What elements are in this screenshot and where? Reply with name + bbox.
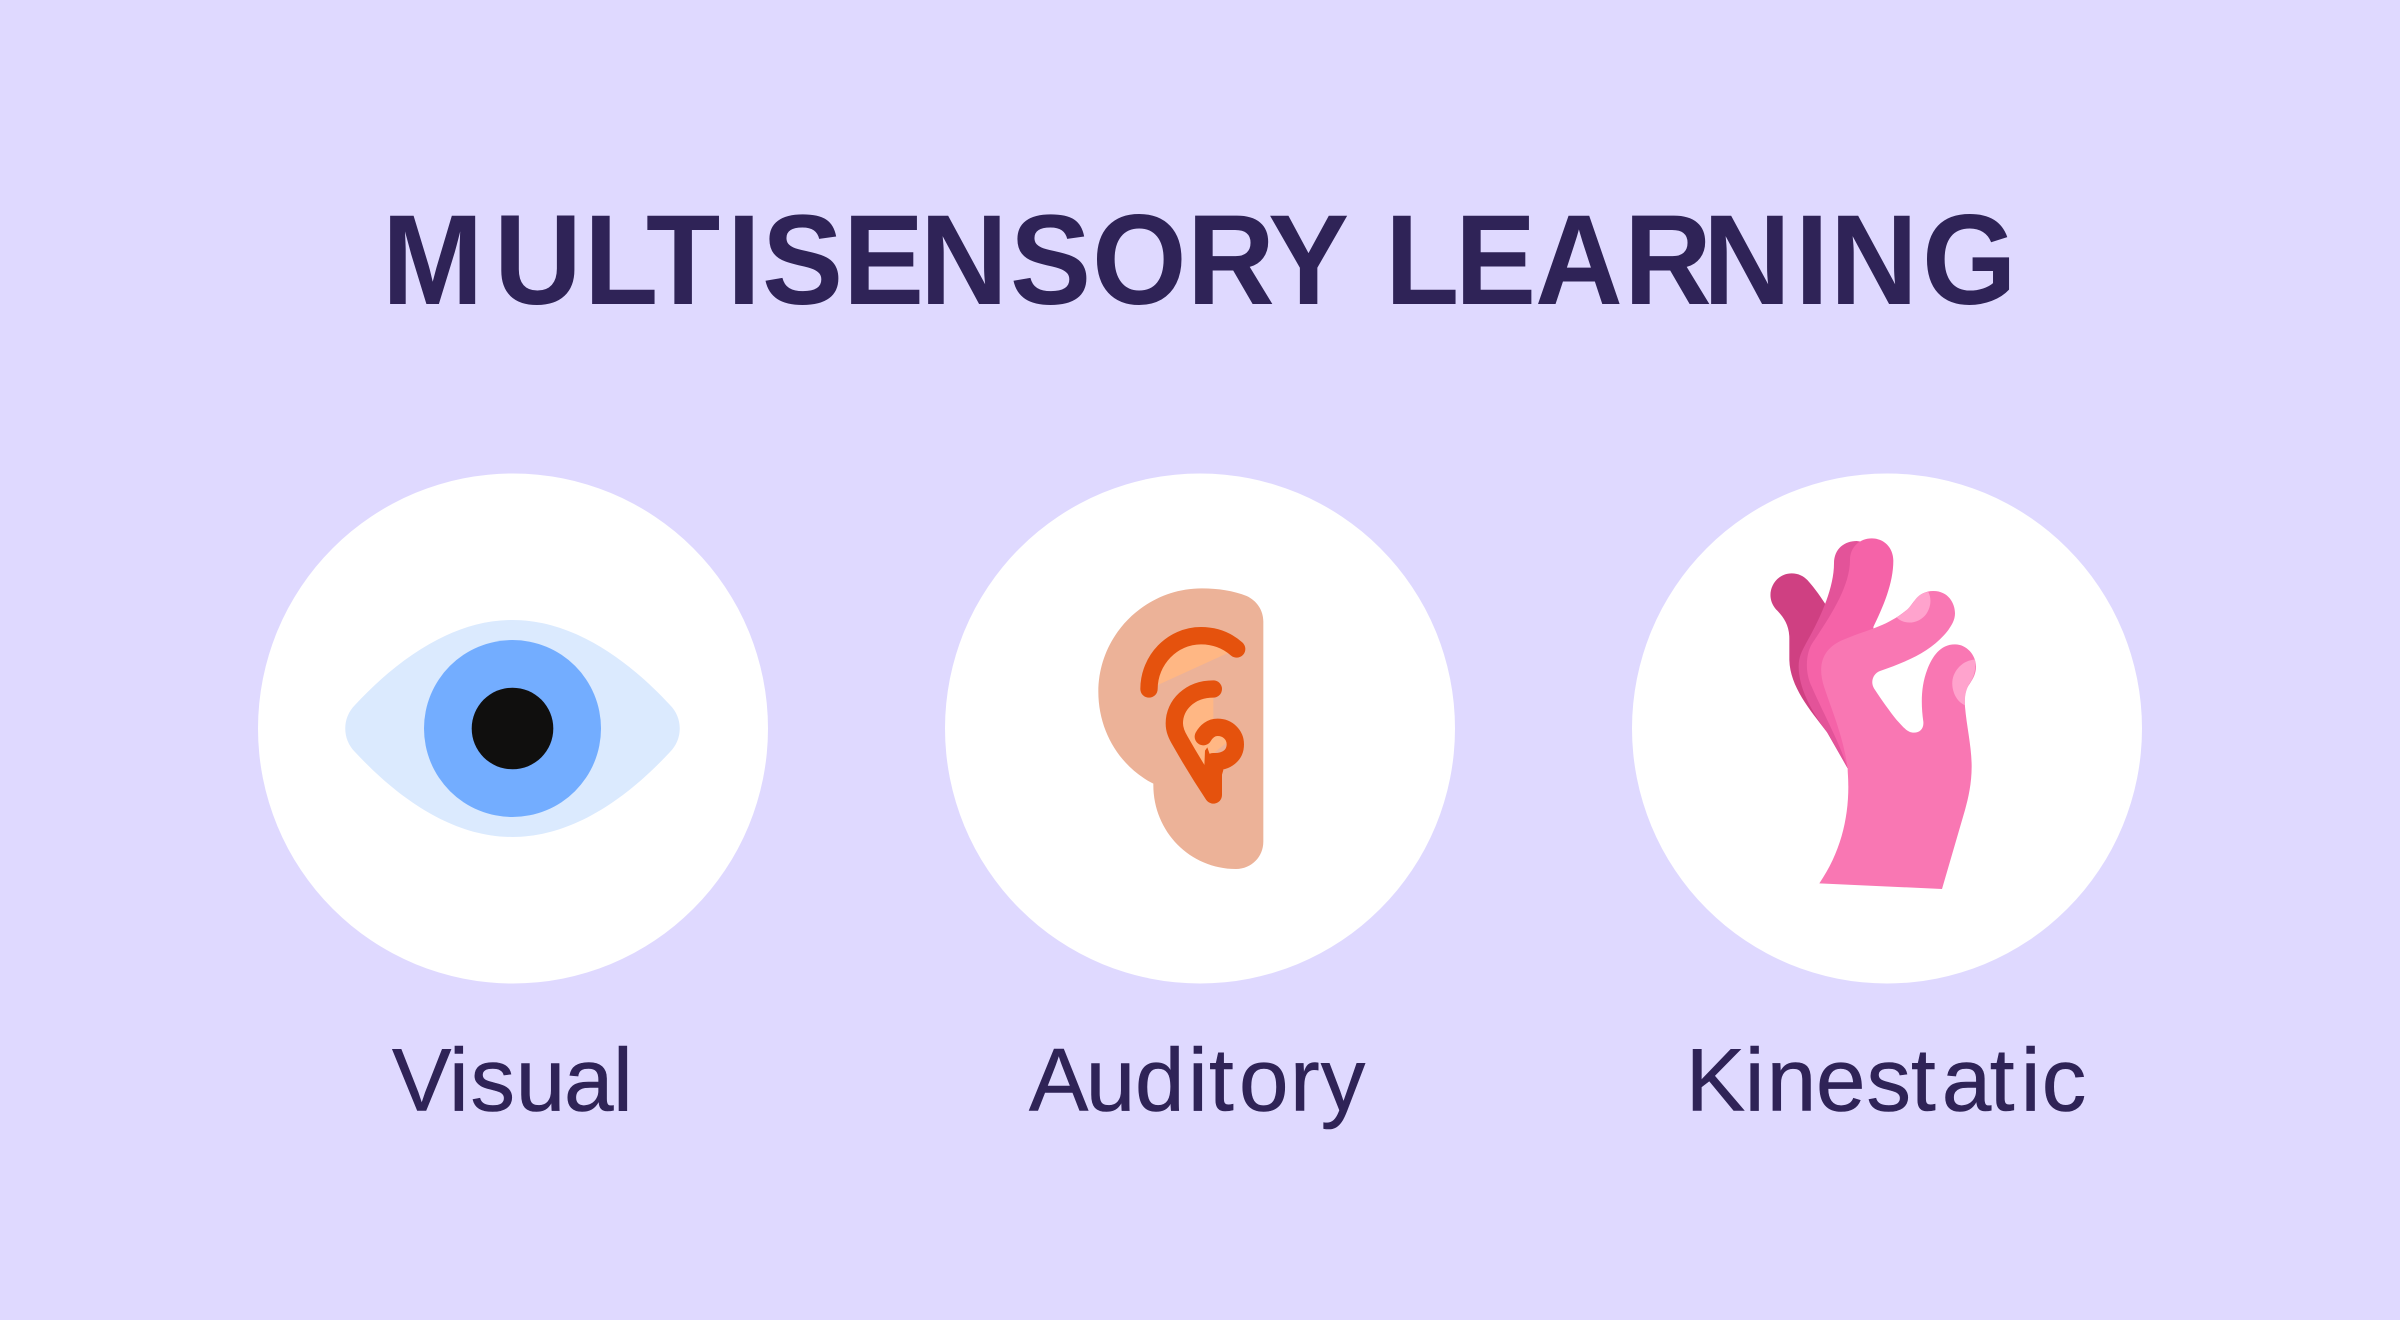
icon: hand xyxy=(1770,538,1976,889)
inner ear canal notch xyxy=(1204,747,1223,793)
label: kinestatic: Kinestatic xyxy=(1686,1030,2086,1130)
icon: ear xyxy=(1098,588,1263,869)
circle: auditory xyxy=(945,474,1455,984)
palm with index finger and thumb xyxy=(1819,591,1976,889)
ring finger xyxy=(1799,541,1873,768)
circle: kinesthetic xyxy=(1632,474,2142,984)
circle: visual xyxy=(258,474,768,984)
inner ear spiral xyxy=(1174,689,1235,795)
middle finger xyxy=(1807,538,1893,768)
thumb nail xyxy=(1952,660,1975,705)
icon: eye xyxy=(345,620,680,837)
back finger xyxy=(1770,573,1867,768)
index fingernail xyxy=(1897,592,1930,623)
pupil xyxy=(472,688,553,769)
upper ear fold xyxy=(1149,636,1237,689)
panel: kinesthetic xyxy=(1632,474,2142,984)
ear shape xyxy=(1098,588,1263,869)
label: visual: Visual xyxy=(392,1030,633,1130)
eye white xyxy=(345,620,680,837)
panel: visual xyxy=(258,474,768,984)
iris xyxy=(424,640,601,817)
inner ear fill xyxy=(1174,689,1230,770)
label: auditory: Auditory xyxy=(1029,1030,1366,1130)
panel: auditory xyxy=(945,474,1455,984)
title: MULTISENSORY LEARNING xyxy=(382,189,2017,332)
